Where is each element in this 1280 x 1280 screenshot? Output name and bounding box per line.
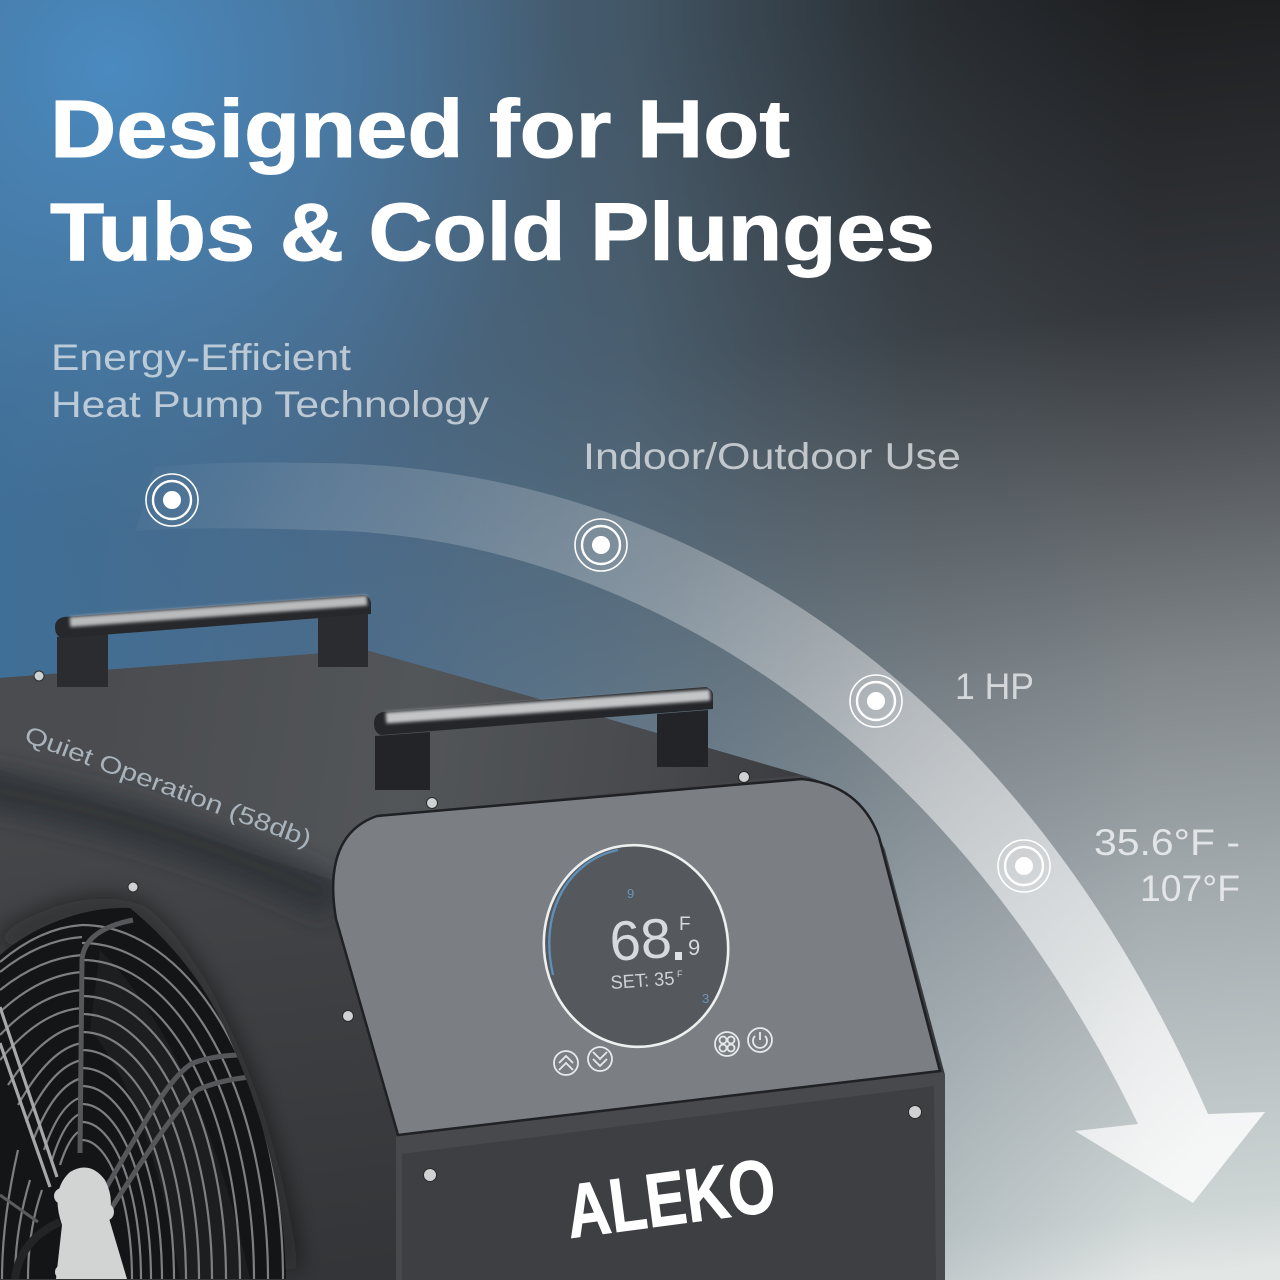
icon: target 1: [146, 474, 198, 526]
title: [50, 84, 935, 278]
feature: temperature range: 107°F: [1140, 868, 1240, 909]
display: 3: [702, 991, 709, 1006]
front frame: [396, 1072, 945, 1280]
feature: energy-efficient heat pump: [51, 337, 490, 425]
screws: [34, 671, 922, 1182]
front handle: [374, 687, 713, 790]
lower front panel: [402, 1086, 936, 1280]
icon: target 3: [850, 675, 902, 727]
product: heat pump unit: [0, 595, 945, 1280]
display: 68: [607, 906, 674, 973]
fan guard: [0, 905, 290, 1279]
left wires: [0, 925, 82, 1279]
display: F: [677, 969, 683, 979]
icon: target 4: [998, 840, 1050, 892]
right wires: [82, 925, 283, 1279]
guard struts: [80, 920, 250, 1210]
curved arrow: [136, 462, 1265, 1203]
title: Tubs & Cold Plunges: [50, 187, 935, 278]
fan hub: [54, 1168, 127, 1279]
display: F: [679, 914, 691, 935]
title: Designed for Hot: [50, 84, 790, 175]
feature: 1 HP: 1 HP: [955, 666, 1034, 707]
control buttons: [554, 1028, 772, 1075]
display: 9: [627, 886, 634, 901]
feature: temperature range: 35.6°F -: [1094, 822, 1240, 863]
feature: energy-efficient heat pump: Heat Pump Technology: [51, 384, 490, 425]
feature: temperature range: [1094, 822, 1240, 909]
machine body: [0, 650, 945, 1280]
display: 9: [688, 935, 700, 960]
display: [531, 833, 741, 1059]
feature: energy-efficient heat pump: Energy-Efficient: [51, 337, 352, 378]
control panel: [333, 779, 940, 1135]
quiet operation label: Quiet Operation (58db): [21, 721, 315, 853]
icon: target 2: [575, 519, 627, 571]
display: SET: 35: [610, 969, 675, 994]
feature: indoor/outdoor use: Indoor/Outdoor Use: [583, 436, 961, 477]
back handle: [55, 595, 371, 687]
brand logo: ALEKO: [561, 1143, 780, 1255]
